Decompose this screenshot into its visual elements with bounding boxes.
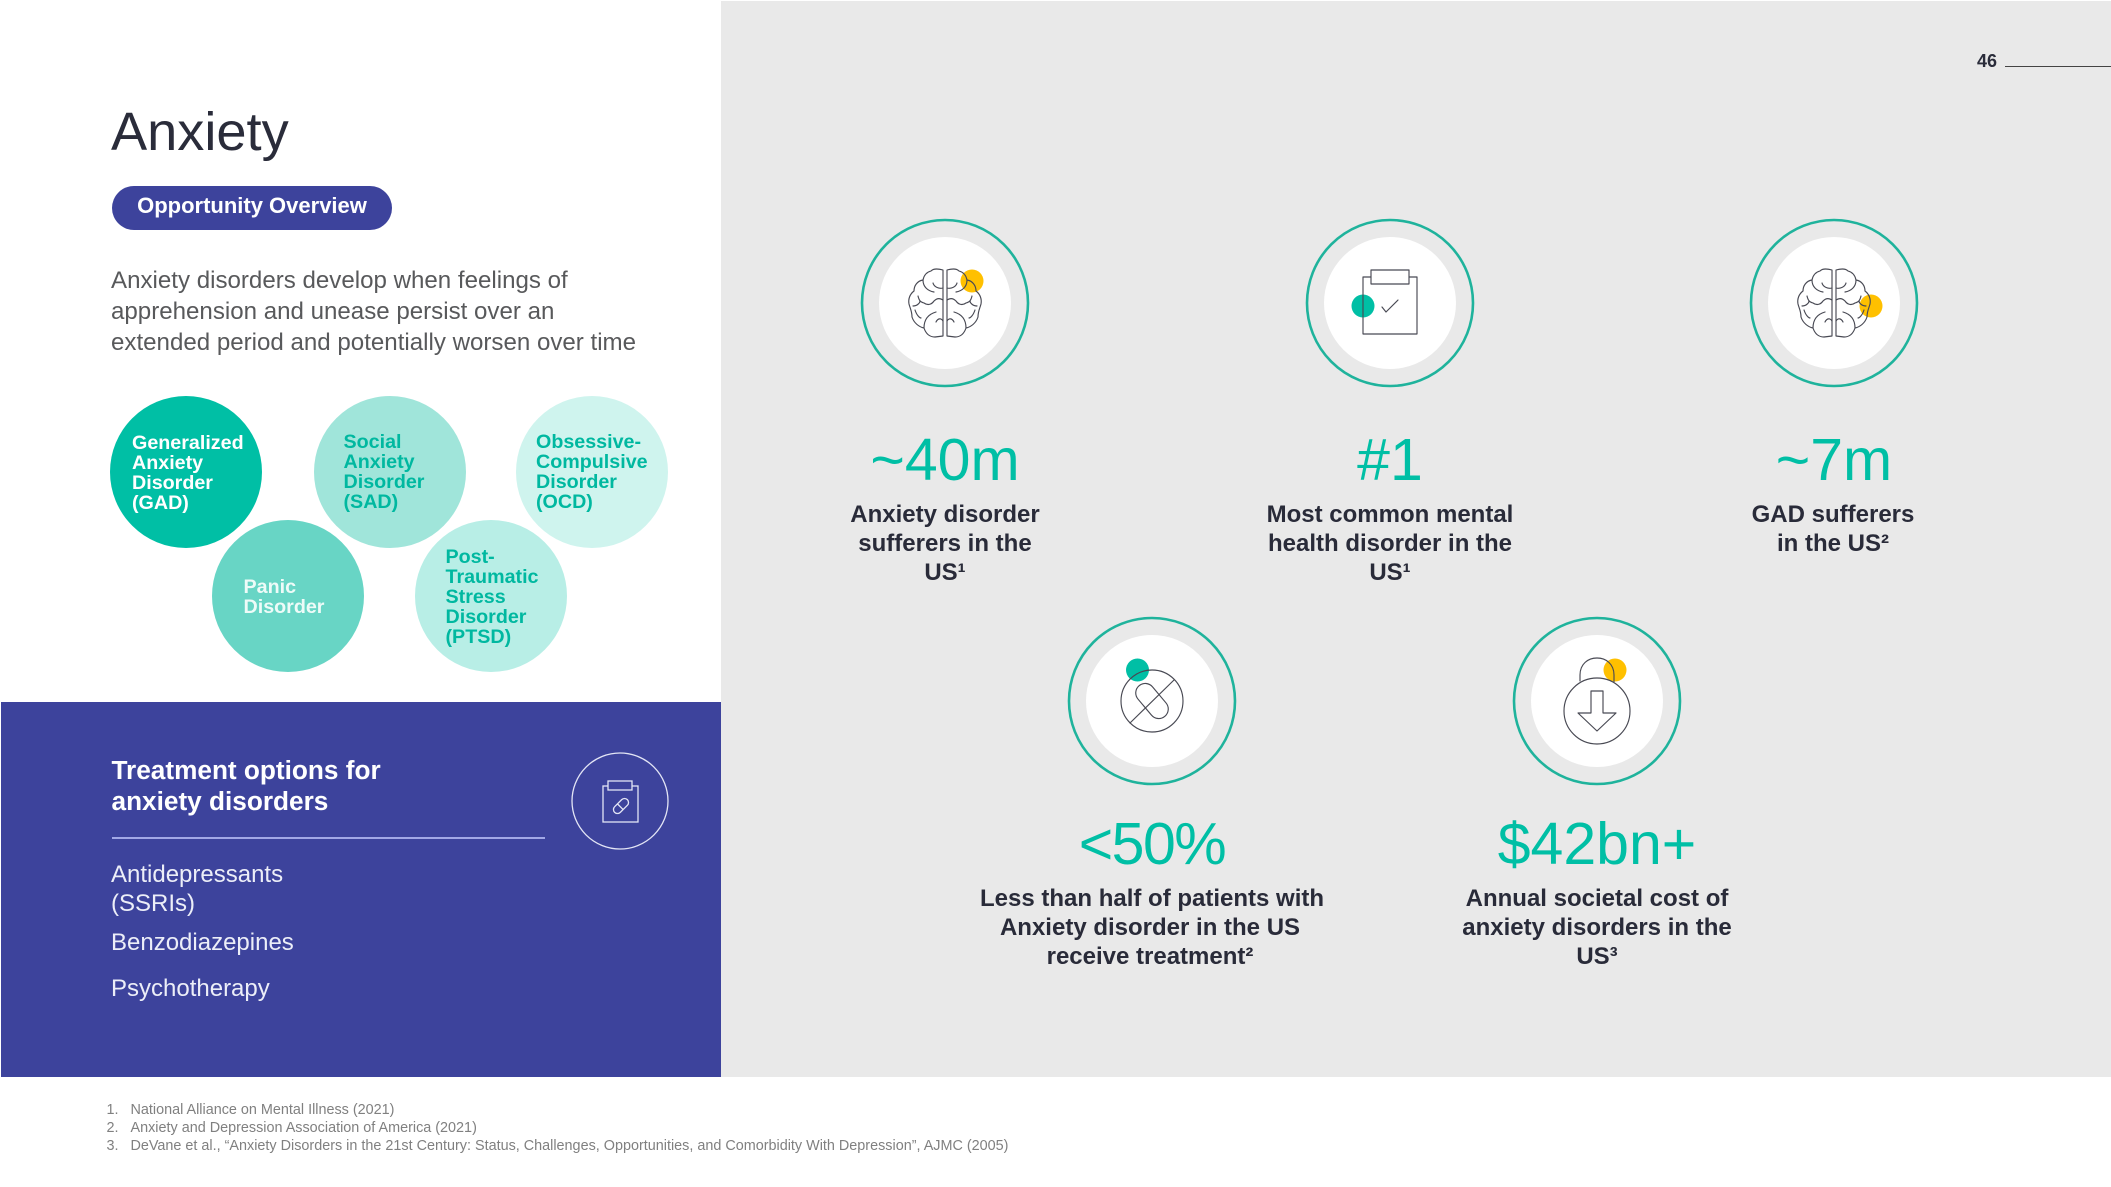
stat description: Most common mental [1267,501,1513,528]
bubble: post-traumatic stress disorder: Traumatic [446,566,539,588]
treatment heading [112,755,381,816]
icon: coin with down arrow [1512,616,1682,786]
bubble: generalized anxiety disorder: Generalized [132,432,244,454]
bubble: post-traumatic stress disorder: Stress [446,586,506,608]
stat description [1267,501,1513,586]
stat description: in the US² [1777,530,1889,557]
bubble: obsessive-compulsive disorder: Compulsive [536,451,648,473]
treatment list: (SSRIs) [111,890,195,916]
stat description: US³ [1576,943,1618,970]
icon: brain with yellow dot [860,218,1030,388]
badge: opportunity overview: Opportunity Overview [137,193,367,218]
bubble cluster: anxiety disorder types [110,396,668,672]
stat description: Anxiety disorder in the US [1000,914,1300,941]
intro text: apprehension and unease persist over an [111,298,554,325]
stat: most common disorder [1267,218,1513,586]
stat: 40m sufferers [850,218,1040,586]
stat: under half treated [980,616,1324,970]
treatment list: Psychotherapy [111,974,270,1002]
bubble: social anxiety disorder: Disorder [344,471,424,493]
bubble: post-traumatic stress disorder: Post- [446,546,495,568]
stat description: US¹ [924,559,966,586]
stat number: ~7m [1776,427,1892,493]
footnotes: DeVane et al., “Anxiety Disorders in the 21st Century: Status, Challenges, Opportunities, and Comorbidity With Depression”, AJMC (2005) [130,1138,1008,1154]
bubble: social anxiety disorder: (SAD) [344,491,398,513]
bubble: post-traumatic stress disorder [414,520,566,672]
intro text: extended period and potentially worsen over time [111,329,636,356]
intro text: Anxiety disorders develop when feelings of [111,267,568,294]
stat number: $42bn+ [1498,811,1696,877]
bubble: social anxiety disorder: Social [344,431,402,453]
treatment list: Benzodiazepines [111,928,294,956]
treatment list: Antidepressants [111,860,283,888]
footnotes: 1. [106,1102,119,1118]
bubble: post-traumatic stress disorder: Disorder [446,606,526,628]
stat: 7m GAD sufferers [1750,218,1918,557]
footnotes: Anxiety and Depression Association of America (2021) [130,1120,477,1136]
stat description: Less than half of patients with [980,885,1324,912]
bubble: generalized anxiety disorder: Anxiety [132,452,203,474]
bubble: panic disorder: Disorder [244,596,324,618]
stat number: ~40m [870,427,1020,493]
bubble: obsessive-compulsive disorder: Disorder [536,471,617,493]
icon: clipboard with check [1306,218,1474,388]
stat number: #1 [1357,427,1423,493]
stat description [1462,885,1732,970]
treatment list [111,860,294,1002]
stat: societal cost [1462,616,1732,970]
bubble: panic disorder: Panic [244,576,296,598]
stat description [1752,501,1914,557]
bubble: obsessive-compulsive disorder [516,396,668,548]
stat description: Anxiety disorder [850,501,1040,528]
stat description: Annual societal cost of [1466,885,1728,912]
bubble: generalized anxiety disorder: (GAD) [132,492,189,514]
panel: grey statistics background [720,1,2111,1077]
bubble: panic disorder [212,520,364,672]
stat description: anxiety disorders in the [1462,914,1732,941]
stat description [850,501,1040,586]
stat description: receive treatment² [1047,943,1253,970]
bubble: generalized anxiety disorder [110,396,262,548]
stat description: sufferers in the [858,530,1032,557]
stat description: health disorder in the [1268,530,1512,557]
bubble: generalized anxiety disorder: Disorder [132,472,213,494]
footnotes: 3. [106,1138,119,1154]
title: Anxiety [111,102,289,162]
footnotes: National Alliance on Mental Illness (2021) [130,1102,394,1118]
icon: clipboard with pill [571,752,669,850]
stat number: <50% [1079,811,1225,877]
bubble: post-traumatic stress disorder: (PTSD) [446,626,511,648]
intro text [111,267,636,356]
badge: opportunity overview [112,186,392,230]
treatment heading: anxiety disorders [112,786,328,816]
footnotes: 2. [106,1120,119,1136]
icon: crossed-out pill [1068,616,1236,786]
bubble: social anxiety disorder [314,396,466,548]
stat description [980,885,1324,970]
bubble: obsessive-compulsive disorder: Obsessive- [536,431,641,453]
stat description: GAD sufferers [1752,501,1914,528]
panel: treatment options [1,702,720,1077]
icon: brain with yellow dot [1750,218,1918,388]
treatment heading: Treatment options for [112,755,381,785]
stat description: US¹ [1369,559,1411,586]
bubble: social anxiety disorder: Anxiety [344,451,415,473]
footnotes [106,1102,1008,1154]
bubble: obsessive-compulsive disorder: (OCD) [536,491,593,513]
page number: 46 [1977,51,1997,71]
